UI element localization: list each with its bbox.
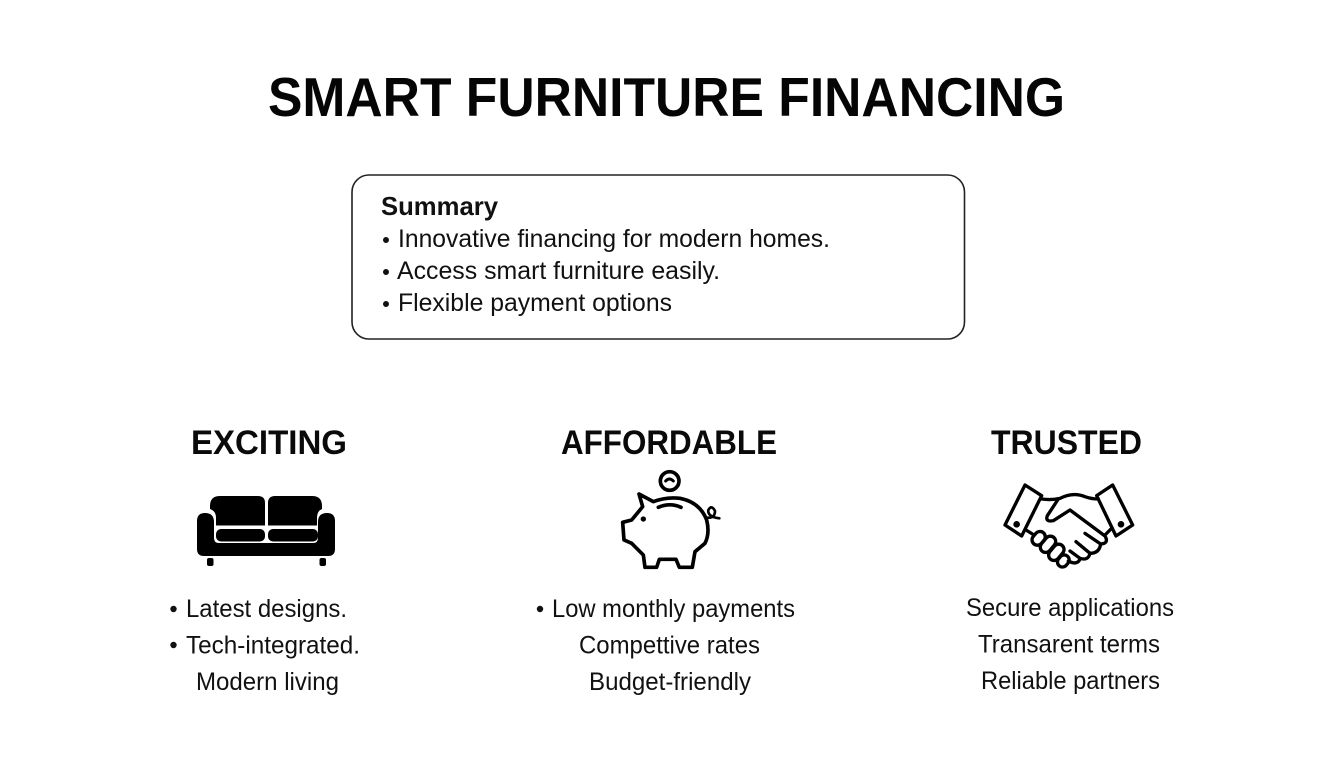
summary heading: Summary xyxy=(381,191,499,221)
panel: summary xyxy=(352,175,964,339)
icon: handshake xyxy=(1005,485,1133,569)
list: trusted: Reliable partners xyxy=(981,667,1160,695)
panel: affordable xyxy=(537,424,795,696)
heading: exciting: EXCITING xyxy=(191,424,347,462)
list: affordable: Low monthly payments xyxy=(552,595,795,623)
list: affordable: Compettive rates xyxy=(579,632,760,660)
list: exciting xyxy=(170,595,360,696)
summary bullet 2: Access smart furniture easily. xyxy=(397,257,720,285)
list: exciting: Modern living xyxy=(196,668,339,696)
heading: affordable: AFFORDABLE xyxy=(561,424,777,462)
list: trusted: Transarent terms xyxy=(978,630,1160,658)
list: exciting: Latest designs. xyxy=(186,595,347,623)
title: SMART FURNITURE FINANCING xyxy=(268,66,1065,128)
heading: trusted: TRUSTED xyxy=(991,424,1142,462)
list: affordable: Budget-friendly xyxy=(589,668,751,696)
list: trusted: Secure applications xyxy=(966,594,1174,622)
list: exciting: Tech-integrated. xyxy=(186,632,360,660)
list: affordable xyxy=(537,595,795,696)
panel: exciting xyxy=(170,424,360,696)
summary bullet 3: Flexible payment options xyxy=(398,289,672,317)
list: trusted xyxy=(966,594,1174,695)
summary bullet 1: Innovative financing for modern homes. xyxy=(398,225,830,253)
icon: sofa xyxy=(197,496,335,566)
panel: trusted xyxy=(966,424,1174,695)
icon: piggy bank xyxy=(623,472,719,567)
